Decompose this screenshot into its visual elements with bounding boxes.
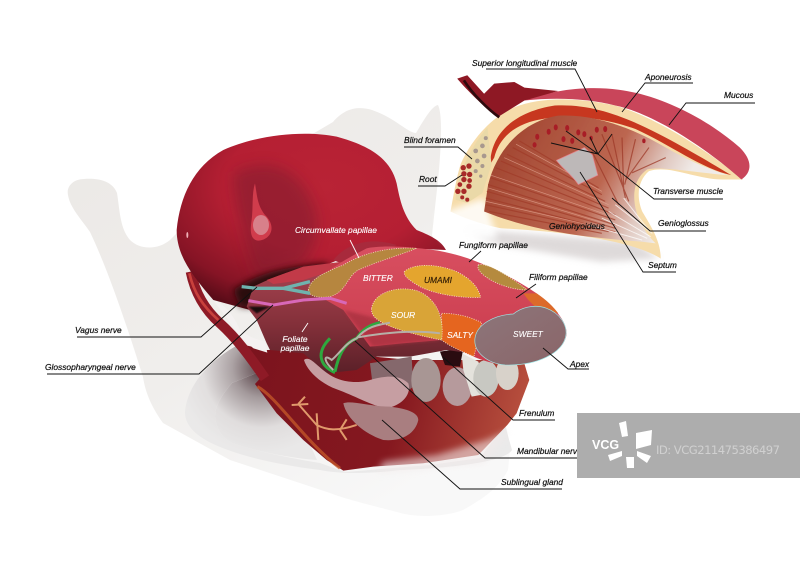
labels: Sublingual gland	[501, 477, 563, 487]
tongue	[242, 241, 567, 440]
taste zone: sweet	[475, 306, 566, 365]
labels: Mucous	[724, 90, 754, 100]
sublingual gland	[343, 402, 418, 440]
labels: papillae	[280, 343, 310, 353]
sublingual nerve branch	[292, 397, 357, 440]
labels: Blind foramen	[404, 135, 456, 145]
mandible muscle strap	[191, 272, 265, 378]
labels: BITTER	[363, 273, 393, 283]
vagus nerve	[242, 282, 310, 293]
labels: Aponeurosis	[644, 72, 692, 82]
labels: SALTY	[447, 330, 474, 340]
palate	[177, 134, 446, 310]
soft shadow	[467, 232, 659, 262]
root papillae	[455, 127, 492, 203]
upper vessel fold	[457, 75, 558, 117]
labels: Glossopharyngeal nerve	[45, 362, 136, 372]
labels: Fungiform papillae	[459, 240, 528, 250]
labels: UMAMI	[424, 275, 453, 285]
labels: Vagus nerve	[75, 325, 122, 335]
labels: Root	[419, 174, 437, 184]
labels: Geniohyoideus	[549, 221, 606, 231]
watermark	[577, 413, 800, 478]
labels: Circumvallate papillae	[295, 225, 377, 235]
glossopharyngeal nerve	[248, 298, 347, 305]
labels: Apex	[569, 359, 590, 369]
muscle fibres	[486, 141, 615, 233]
labels: Genioglossus	[658, 218, 710, 228]
septum	[556, 148, 598, 185]
watermark: ID: VCG211475386497	[656, 443, 780, 457]
watermark: VCG	[592, 438, 619, 452]
tongue top	[308, 247, 567, 365]
teeth	[370, 348, 519, 406]
jaw bone	[68, 105, 512, 516]
genioglossus fan	[484, 115, 728, 243]
labels	[45, 58, 754, 487]
inner jaw shadow	[185, 345, 512, 473]
white gap	[212, 298, 267, 353]
labels: Foliate	[282, 334, 308, 344]
lower jaw and floor of mouth	[189, 272, 529, 473]
tongue side	[247, 263, 470, 373]
muscular border	[257, 387, 340, 468]
taste zone: salty	[442, 313, 482, 357]
labels: Superior longitudinal muscle	[472, 58, 578, 68]
labels: Septum	[648, 260, 677, 270]
floor of mouth	[237, 343, 529, 471]
taste zone: upper right	[478, 265, 527, 290]
uvula	[251, 183, 272, 241]
submandibular gland	[304, 359, 409, 408]
labels: SOUR	[391, 310, 415, 320]
cream base	[450, 99, 743, 259]
labels: Transverse muscle	[653, 186, 723, 196]
labels: SWEET	[513, 329, 544, 339]
mandibular nerve	[321, 323, 380, 373]
taste zone: bitter	[308, 248, 417, 297]
labels: Frenulum	[519, 408, 554, 418]
inset: tongue cross-section	[437, 75, 749, 262]
mucosa	[524, 88, 749, 180]
superior longitudinal muscle	[490, 105, 731, 175]
leader lines	[47, 69, 755, 489]
taste zone: sour	[372, 289, 442, 340]
cream fade	[437, 198, 498, 242]
labels: Mandibular nerve	[517, 446, 582, 456]
labels: Filiform papillae	[529, 272, 588, 282]
taste zone: umami	[404, 265, 481, 297]
